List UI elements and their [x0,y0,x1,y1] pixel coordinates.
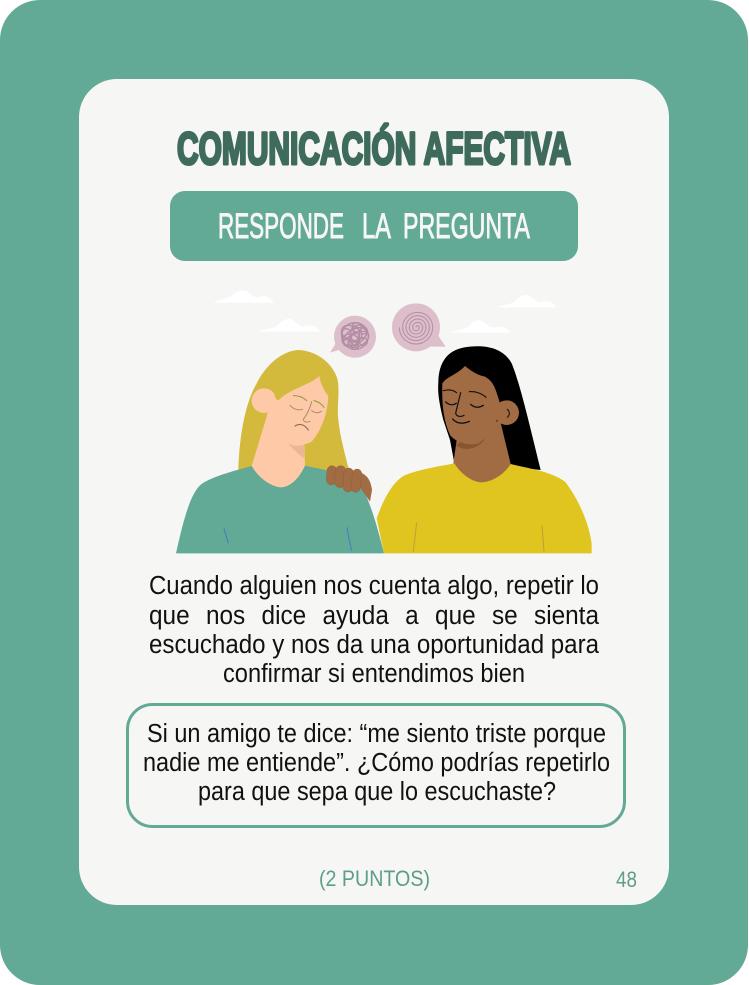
explanatory text [149,572,600,688]
supportive hand [326,465,372,502]
question box: Si un amigo te dice: “me siento triste porque [147,720,606,748]
subtitle banner: LA [362,207,391,246]
explanatory text: Cuando alguien nos cuenta algo, repetir lo [149,572,599,600]
illustration: two friends [176,290,592,553]
explanatory text: confirmar si entendimos bien [223,660,525,688]
points label: (2 PUNTOS) [319,866,430,891]
subtitle banner: PREGUNTA [403,207,530,246]
clouds [213,290,557,333]
question box [128,704,624,826]
dark-haired woman [377,346,592,553]
speech bubble: spiral thoughts [392,303,446,351]
speech bubble: tangled thoughts [330,316,376,358]
explanatory text: que nos dice ayuda a que se sienta [149,602,600,630]
question box: para que sepa que lo escuchaste? [198,778,556,806]
inner panel [79,79,669,905]
explanatory text: escuchado y nos da una oportunidad para [149,631,600,659]
question box: nadie me entiende”. ¿Cómo podrías repetirlo [143,749,610,777]
subtitle banner: RESPONDE [218,207,344,246]
page number: 48 [616,867,637,892]
blonde woman [176,350,384,553]
subtitle banner [170,191,578,261]
